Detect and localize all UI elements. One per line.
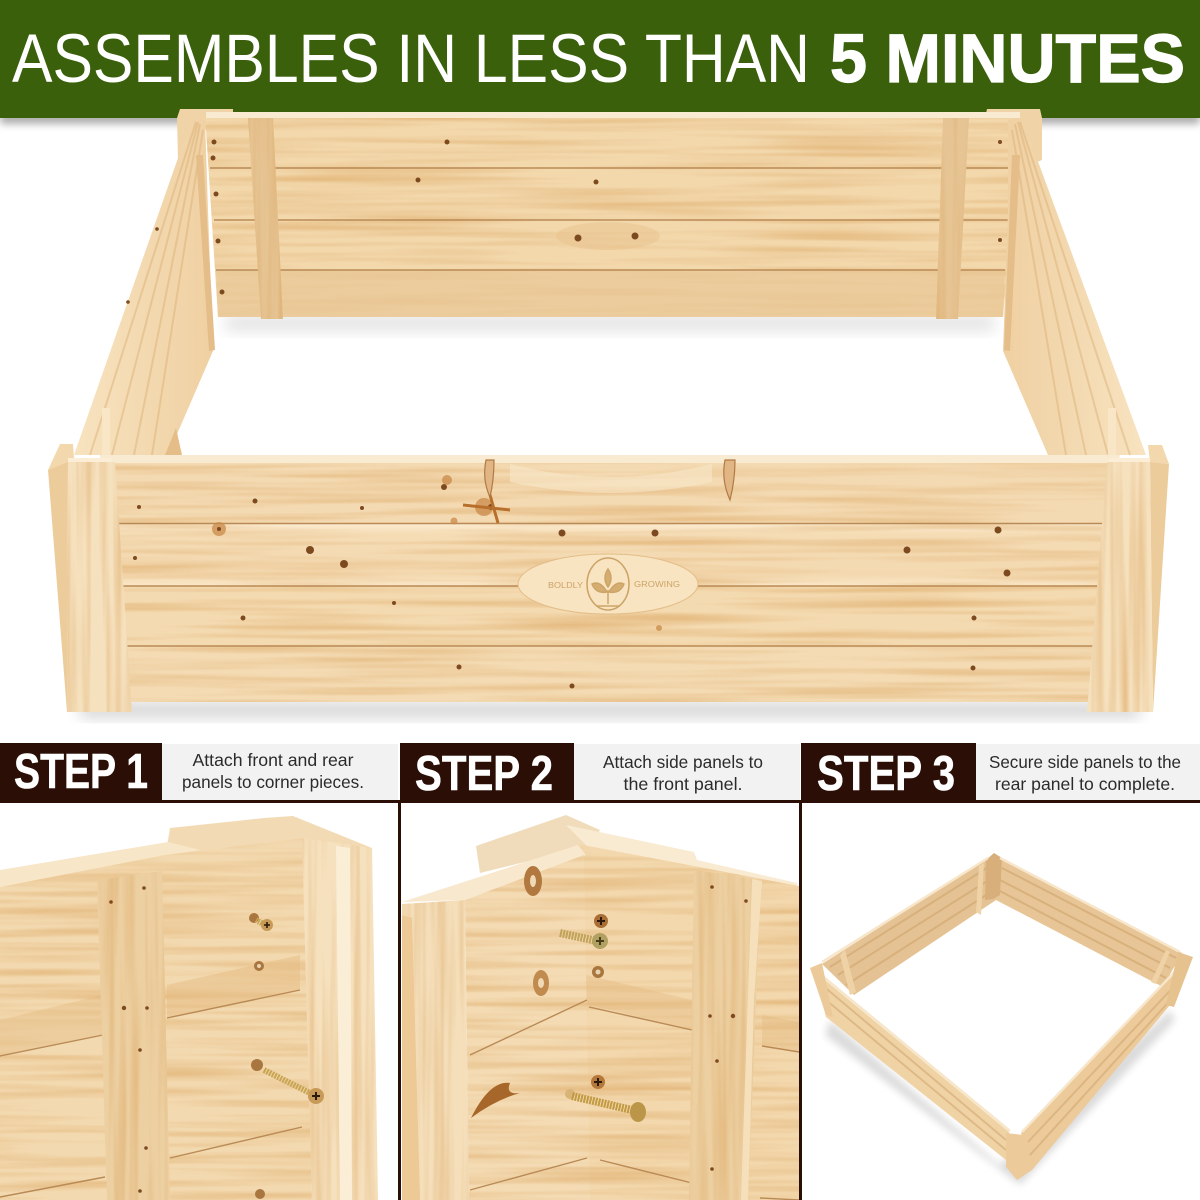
plaque text: BOLDLY — [548, 580, 583, 590]
headline: ASSEMBLES IN LESS THAN — [12, 20, 810, 97]
step 3 photo: assembled planter — [810, 853, 1193, 1185]
front left corner post — [48, 444, 132, 712]
left wall — [74, 118, 215, 455]
step 3 label: STEP 3 — [817, 747, 955, 801]
step 3 front wall grain — [822, 980, 1180, 1155]
step 3 rear wall grain — [830, 866, 1176, 985]
step 2 knots — [471, 866, 549, 1118]
step 2 description: the front panel. — [624, 774, 742, 794]
step 3 description: rear panel to complete. — [995, 774, 1175, 794]
rear wall — [205, 112, 1020, 319]
floor shadows — [80, 316, 1140, 716]
step 3 rear corner — [985, 853, 1002, 900]
step 3 description — [976, 744, 1200, 800]
step 2 side panel — [402, 845, 590, 1200]
step 1 label: STEP 1 — [14, 745, 148, 799]
step 3 back left wall — [822, 858, 998, 995]
step 1 top ledge — [0, 842, 200, 887]
header banner — [0, 0, 1200, 124]
step 2 rear panel — [578, 844, 799, 1200]
rear right cleat — [936, 118, 969, 319]
step 1 corner post — [302, 838, 378, 1200]
plaque logo — [587, 558, 629, 610]
rear wall knots — [210, 140, 1002, 294]
step 2 photo — [402, 815, 799, 1200]
right wall — [1003, 118, 1146, 455]
front wall boards — [100, 455, 1120, 702]
main planter photo illustration — [48, 109, 1169, 716]
step 2 label: STEP 2 — [415, 747, 553, 801]
step 2 description: Attach side panels to — [603, 752, 763, 772]
step 3 rear cleats — [840, 863, 1170, 995]
step 3 front left wall — [814, 971, 1009, 1160]
step 3 left post — [810, 963, 833, 1017]
step 3 front post — [1006, 1133, 1032, 1180]
front wall knots — [133, 460, 1010, 688]
step divider lines — [0, 800, 1200, 1200]
icon: screw holes and screws step 1 — [249, 913, 324, 1199]
step 3 shadow — [825, 1010, 1175, 1185]
step 1 panel — [0, 838, 312, 1200]
rear left cleat — [248, 118, 283, 319]
step 2 rear post top — [476, 815, 600, 873]
step 1 description — [162, 744, 398, 800]
step 3 top rim — [815, 858, 1186, 1132]
step 2 rear panel ledge — [566, 825, 797, 888]
front right corner post — [1087, 445, 1169, 712]
rear corner tops — [177, 109, 1042, 165]
step 1 photo — [0, 816, 378, 1200]
step 1 cleat holes — [109, 886, 149, 1193]
step 3 right post — [1166, 952, 1193, 1007]
step 1 cleat — [97, 871, 170, 1200]
headline: 5 MINUTES — [830, 20, 1185, 97]
step 1 description: panels to corner pieces. — [182, 772, 364, 792]
step bars — [0, 743, 1200, 1200]
step 3 front right wall — [1021, 960, 1185, 1170]
step 2 description — [574, 744, 800, 800]
step 3 description: Secure side panels to the — [989, 752, 1181, 772]
logo plaque — [518, 554, 698, 614]
step 3 back right wall — [996, 857, 1182, 987]
step 2 rear cleat — [689, 870, 762, 1200]
icon: screw holes and screws step 2 — [560, 914, 646, 1122]
step 1 rear post top — [165, 816, 372, 858]
step 1 description: Attach front and rear — [192, 750, 354, 770]
logo plaque: GROWING — [634, 579, 680, 589]
